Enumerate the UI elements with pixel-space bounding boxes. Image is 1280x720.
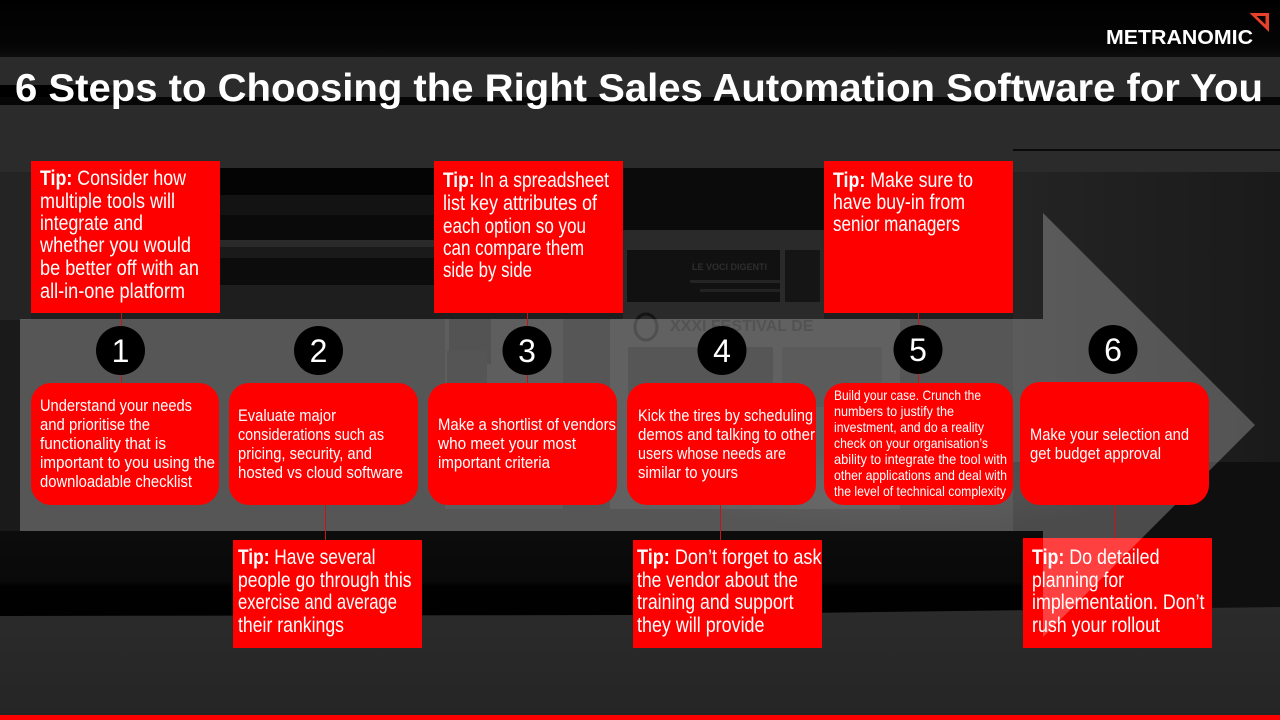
tip 3: list key attributes of [443, 192, 597, 215]
tip 4: Tip: Don’t forget to ask [637, 546, 822, 569]
step 1 number: 1 [112, 333, 129, 369]
tip 1: multiple tools will [40, 190, 175, 213]
step 4 box: demos and talking to other [638, 425, 815, 444]
background: faded poster wall behind the arrow: XXXI FESTIVAL DE [670, 318, 814, 335]
tip 2: Tip: Have several [238, 546, 376, 569]
step 3 box: who meet your most [437, 434, 576, 453]
step 1 box: and prioritise the [40, 415, 150, 434]
tip 1 [31, 161, 220, 313]
step 3 number: 3 [518, 333, 536, 369]
step 4 box: users whose needs are [638, 444, 786, 463]
step 5 box: the level of technical complexity [834, 483, 1006, 499]
step 1 box: Understand your needs [40, 396, 192, 415]
connector lines [122, 313, 1114, 540]
tip 2: their rankings [238, 614, 344, 637]
footer bar [0, 715, 1280, 720]
step 3 box: important criteria [438, 453, 550, 472]
tip 6: planning for [1032, 569, 1124, 592]
step 1 box: important to you using the [40, 453, 215, 472]
tip 3: can compare them [443, 237, 584, 260]
tip 1: all-in-one platform [40, 280, 185, 303]
step 5 number [894, 325, 942, 374]
step 1 number [96, 326, 145, 375]
step 2 box: considerations such as [238, 425, 384, 444]
step 2 box: Evaluate major [238, 406, 336, 425]
tip 5: senior managers [833, 213, 960, 236]
tip 5: Tip: Make sure to [833, 169, 973, 192]
tip 3 [434, 161, 623, 313]
tip 3: Tip: In a spreadsheet [443, 169, 609, 192]
tip 6 [1023, 538, 1212, 648]
step 2 number: 2 [310, 333, 327, 369]
tip 6: Tip: Do detailed [1032, 546, 1160, 569]
tip 4: training and support [637, 591, 794, 614]
tip 2 [233, 540, 422, 648]
step 3 box [428, 383, 617, 505]
step 4 box [627, 383, 816, 505]
tip 2: people go through this [238, 569, 412, 592]
step 1 box: downloadable checklist [40, 472, 192, 491]
tip 3: each option so you [443, 215, 586, 238]
step 4 box: Kick the tires by scheduling [638, 406, 813, 425]
step 4 number [698, 326, 746, 375]
step 5 box [824, 383, 1013, 505]
tip 4 [633, 540, 822, 648]
step 4 box: similar to yours [638, 463, 738, 482]
step 6 box [1020, 382, 1209, 505]
tip 1: integrate and [40, 212, 143, 235]
tip 4: they will provide [637, 614, 764, 637]
tip 2: exercise and average [238, 591, 397, 614]
tip 1: whether you would [39, 234, 191, 257]
step 4 number: 4 [713, 333, 731, 369]
step 6 box: get budget approval [1030, 444, 1161, 463]
step 3 box: Make a shortlist of vendors [438, 415, 616, 434]
step 3 number [502, 326, 552, 375]
step 2 box: pricing, security, and [238, 444, 372, 463]
tip 6: implementation. Don’t [1032, 591, 1205, 614]
step 2 number [294, 326, 343, 375]
logo: Metranomic [1106, 13, 1269, 49]
background: faded poster wall behind the arrow: LE VOCI DIGENTI [692, 262, 767, 272]
tip 1: be better off with an [40, 257, 199, 280]
tip 5: have buy-in from [833, 191, 965, 214]
step 1 box [31, 383, 219, 505]
step 5 number: 5 [909, 332, 927, 368]
tip 4: the vendor about the [637, 569, 798, 592]
step 6 box: Make your selection and [1030, 425, 1189, 444]
arrow: large translucent process arrow [20, 213, 1255, 637]
step 6 number [1088, 325, 1138, 374]
step 5 box: check on your organisation’s [834, 435, 988, 451]
step 5 box: numbers to justify the [834, 403, 954, 419]
step 5 box: investment, and do a reality [834, 419, 984, 435]
tip 6: rush your rollout [1032, 614, 1160, 637]
step 1 box: functionality that is [40, 434, 166, 453]
step 5 box: other applications and deal with [834, 467, 1007, 483]
logo: Metranomic: METRANOMIC [1106, 26, 1253, 49]
step 2 box [229, 383, 418, 505]
tip 1: Tip: Consider how [40, 167, 187, 190]
step 2 box: hosted vs cloud software [238, 463, 403, 482]
step 6 number: 6 [1104, 332, 1122, 368]
step 5 box: ability to integrate the tool with [834, 451, 1007, 467]
tip 5 [824, 161, 1013, 313]
title: 6 Steps to Choosing the Right Sales Automation Software for You [15, 67, 1263, 110]
background: faded poster wall behind the arrow [445, 250, 900, 509]
step 5 box: Build your case. Crunch the [834, 387, 981, 403]
tip 3: side by side [443, 259, 532, 282]
